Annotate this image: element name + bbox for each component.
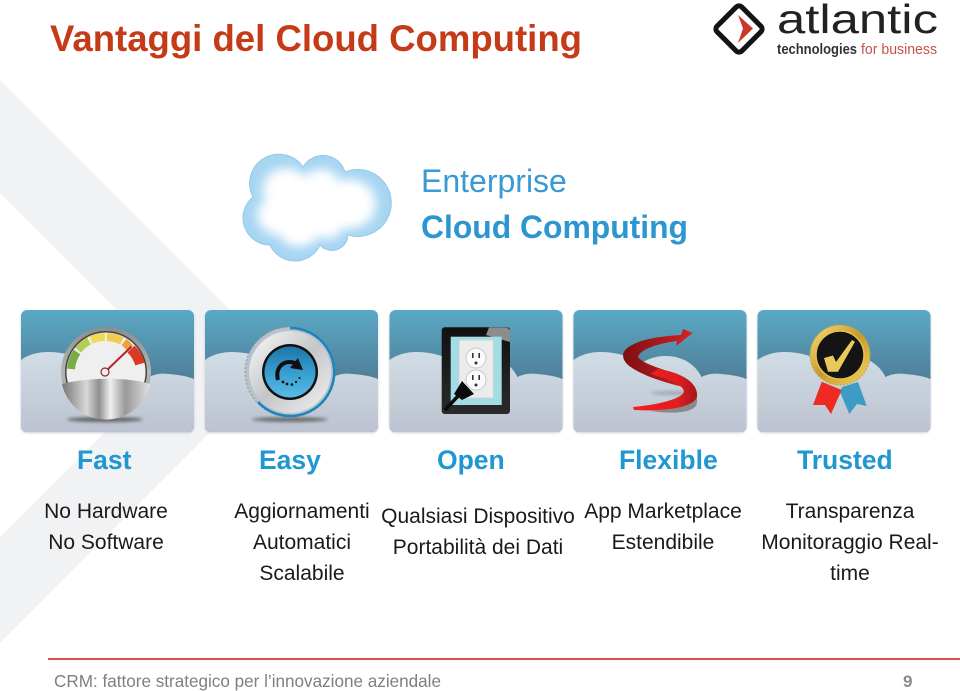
text: Trusted details: [761, 500, 939, 585]
text: Trusted details: time: [830, 562, 870, 585]
panel: Open tablet card: [390, 310, 562, 433]
icon: quality medal: [810, 325, 870, 414]
panel: Flexible arrow card: [574, 310, 746, 433]
heading: Fast: Fast: [77, 445, 132, 475]
text: Trusted details: Monitoraggio Real-: [761, 531, 939, 554]
text: Easy details: Scalabile: [259, 562, 345, 585]
icon: cloud logo: [243, 154, 391, 261]
logo: atlantic technologies for business: technologies: [777, 42, 857, 58]
icon: tablet with socket and plug: [442, 327, 510, 414]
background chevron: [0, 80, 281, 643]
icon: update dial: [245, 327, 335, 422]
text: Open details: Qualsiasi Dispositivo: [381, 505, 575, 528]
heading: Enterprise Cloud Computing: Cloud Computing: [421, 209, 688, 245]
text: Flexible details: Estendibile: [612, 531, 714, 554]
logo: atlantic technologies for business: for business: [861, 42, 937, 58]
text: Easy details: Automatici: [253, 531, 351, 554]
footer text: CRM: fattore strategico per l’innovazione aziendale: [54, 671, 441, 691]
panel: Easy dial card: [205, 310, 378, 433]
text: Easy details: [234, 500, 370, 585]
text: Open details: [381, 505, 575, 559]
text: Fast details: No Hardware: [44, 500, 168, 523]
text: Fast details: No Software: [48, 531, 164, 554]
text: Fast details: [44, 500, 168, 554]
text: Flexible details: App Marketplace: [584, 500, 742, 523]
text: Trusted details: Transparenza: [786, 500, 915, 523]
icon: speed gauge: [61, 327, 151, 422]
icon: flexible S arrow: [623, 329, 697, 413]
text: Flexible details: [584, 500, 742, 554]
title: Vantaggi del Cloud Computing: [50, 18, 582, 59]
heading: Flexible: Flexible: [619, 445, 718, 475]
heading: Enterprise Cloud Computing: Enterprise: [421, 163, 567, 199]
panel: Fast gauge card: [21, 310, 194, 433]
heading: Open: Open: [437, 445, 505, 475]
heading: Enterprise Cloud Computing: [421, 163, 688, 245]
text: Open details: Portabilità dei Dati: [393, 536, 563, 559]
page number: 9: [903, 672, 912, 691]
heading: Trusted: Trusted: [797, 445, 893, 475]
panel: Trusted medal card: [758, 310, 930, 433]
logo: atlantic technologies for business: [714, 0, 938, 58]
heading: Easy: Easy: [259, 445, 321, 475]
text: Easy details: Aggiornamenti: [234, 500, 370, 523]
